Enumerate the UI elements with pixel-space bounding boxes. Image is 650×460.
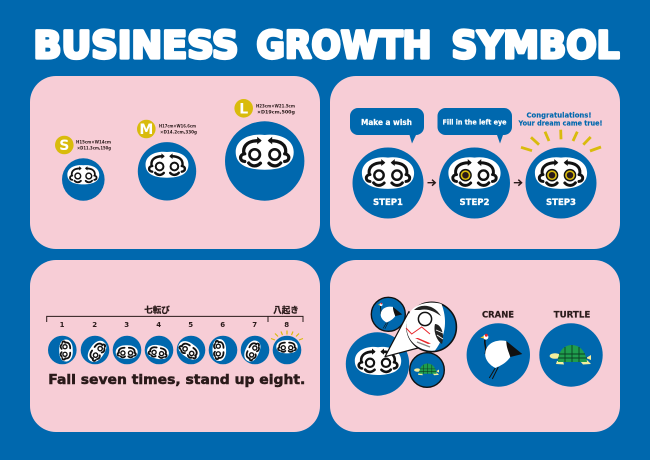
step 1 daruma — [352, 148, 424, 218]
arrow 2 — [514, 180, 522, 186]
speech bubble 1: Make a wish — [361, 118, 412, 127]
main daruma — [346, 332, 409, 396]
size text M: H17cm×W16.6cm — [159, 124, 196, 130]
step 2 daruma — [439, 148, 510, 218]
count numbers: 5 — [188, 321, 193, 329]
title: SYMBOL — [452, 24, 620, 67]
size text M — [159, 124, 197, 136]
rising rays — [271, 330, 303, 340]
size badge S — [55, 136, 74, 154]
size text M: ×D14.2cm,330g — [160, 130, 197, 136]
speech bubble 1 — [350, 108, 424, 144]
count numbers — [60, 321, 289, 329]
large daruma — [225, 121, 304, 201]
count numbers: 4 — [156, 321, 161, 329]
count numbers: 6 — [220, 321, 225, 329]
step 3 daruma: STEP3 — [546, 198, 576, 208]
size text L: H23cm×W21.5cm — [256, 104, 295, 110]
crane circle — [467, 323, 530, 387]
size text S: H15cm×W14cm — [76, 140, 112, 144]
congratulations text — [518, 112, 602, 128]
speech bubble 2: Fill in the left eye — [442, 117, 507, 126]
size text S — [76, 140, 112, 150]
panel: sizes — [30, 76, 320, 249]
congratulations text: Your dream came true! — [518, 120, 602, 128]
title — [34, 24, 620, 67]
bracket — [47, 316, 303, 322]
inset: turtle — [410, 353, 444, 387]
daruma row — [48, 336, 301, 365]
title: BUSINESS — [34, 24, 238, 67]
celebration rays — [521, 130, 601, 151]
count numbers: 2 — [92, 321, 97, 329]
magnified eye callout — [385, 302, 456, 357]
panel: steps — [330, 76, 620, 249]
size badge M: M — [139, 122, 153, 138]
arrow 1 — [428, 180, 435, 186]
size badge L: L — [239, 102, 248, 118]
speech bubble 2 — [438, 108, 512, 144]
count numbers: 8 — [284, 321, 289, 329]
size text L: ×D19cm,500g — [257, 110, 295, 116]
heading: turtle: TURTLE — [554, 310, 590, 320]
size text L — [256, 104, 295, 116]
step 2 daruma: STEP2 — [460, 198, 490, 208]
step 1 daruma: STEP1 — [373, 198, 403, 208]
size text S: ×D11.3cm,150g — [77, 146, 111, 150]
small daruma — [62, 158, 105, 201]
count numbers: 7 — [252, 321, 257, 329]
count numbers: 3 — [124, 321, 129, 329]
panel: fall seven times — [30, 260, 320, 432]
panel: symbols — [330, 260, 620, 432]
inset: crane — [371, 297, 405, 331]
proverb caption: Fall seven times, stand up eight. — [48, 373, 305, 388]
turtle circle — [539, 323, 603, 387]
step 3 daruma — [526, 148, 596, 218]
size badge L — [234, 99, 253, 118]
heading: eight rises: 八起き — [273, 305, 299, 316]
size badge M — [137, 120, 156, 138]
count numbers: 1 — [60, 321, 65, 329]
congratulations text: Congratulations! — [526, 112, 592, 120]
heading: crane: CRANE — [482, 310, 514, 320]
title: GROWTH — [256, 24, 432, 67]
medium daruma — [138, 142, 196, 200]
size badge S: S — [59, 138, 69, 154]
heading: seven falls: 七転び — [144, 305, 170, 316]
